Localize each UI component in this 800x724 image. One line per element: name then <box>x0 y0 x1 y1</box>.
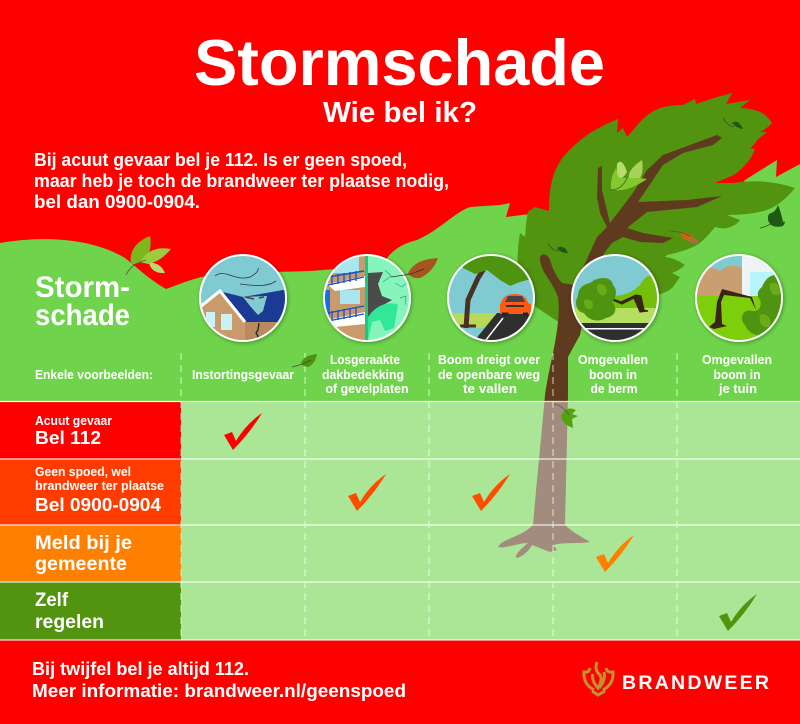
row text: meld bij je gemeente: Meld bij je <box>35 533 132 554</box>
row text: meld bij je gemeente: gemeente <box>35 554 127 575</box>
row text: acuut gevaar: Acuut gevaar <box>35 414 112 428</box>
leaf: dark on canopy left <box>548 243 568 253</box>
heading: Storm-schade: schade <box>35 299 130 332</box>
wordmark: BRANDWEER <box>622 672 771 694</box>
label: omgevallen berm: de berm <box>590 381 638 396</box>
label: boom dreigt: te vallen <box>463 381 517 396</box>
row text: meld bij je gemeente <box>35 533 132 575</box>
icon: fallen tree at verge <box>570 250 660 346</box>
label: losgeraakte dakbedekking: of gevelplaten <box>326 381 409 396</box>
label: boom dreigt: de openbare weg <box>438 367 540 382</box>
title: Stormschade <box>194 26 605 99</box>
green hills <box>0 160 800 640</box>
heading: Storm-schade: Storm- <box>35 271 130 304</box>
tree trunk and branches <box>498 135 722 558</box>
check: omgevallen tuin <box>719 594 757 631</box>
label: instortingsgevaar: Instortingsgevaar <box>192 367 294 382</box>
icon: loose cladding <box>320 250 415 346</box>
row: geen spoed <box>0 459 181 525</box>
icon: fallen tree in garden <box>694 250 786 346</box>
logo: brandweer <box>584 662 771 695</box>
check: omgevallen berm <box>596 535 634 572</box>
intro text: maar heb je toch de brandweer ter plaatse nodig, <box>34 171 449 191</box>
label: omgevallen tuin: boom in <box>714 367 761 382</box>
leaf: dark green at right <box>760 205 785 228</box>
row text: geen spoed: Geen spoed, wel <box>35 465 131 479</box>
icon: flame shield <box>584 662 613 695</box>
tree <box>498 93 795 558</box>
row text: acuut gevaar: Bel 112 <box>35 427 101 448</box>
label: omgevallen berm <box>578 352 648 396</box>
footer band <box>0 641 800 724</box>
row: meld bij gemeente <box>0 525 181 582</box>
row text: zelf regelen: regelen <box>35 612 104 633</box>
label: boom dreigt: Boom dreigt over <box>438 352 540 367</box>
label: boom dreigt <box>438 352 540 396</box>
intro text: Bij acuut gevaar bel je 112. Is er geen spoed, <box>34 150 407 170</box>
heading: Storm-schade <box>35 271 130 332</box>
tree canopy <box>518 93 795 323</box>
subtitle: Wie bel ik? <box>323 97 477 129</box>
check: instortingsgevaar <box>224 413 262 450</box>
intro text: bel dan 0900-0904. <box>34 192 200 212</box>
label: omgevallen tuin: Omgevallen <box>702 352 772 367</box>
footer text <box>32 658 406 701</box>
column labels <box>192 352 772 396</box>
leaf: dark on canopy top right <box>723 118 743 129</box>
label: omgevallen tuin: je tuin <box>718 381 757 396</box>
row text: geen spoed: brandweer ter plaatse <box>35 479 164 493</box>
icon: tree over road <box>445 250 537 346</box>
row text: geen spoed: Bel 0900-0904 <box>35 494 162 515</box>
label: omgevallen tuin <box>702 352 772 396</box>
check: losgeraakte <box>348 474 386 511</box>
row text: geen spoed <box>35 465 164 515</box>
row text: zelf regelen: Zelf <box>35 590 69 611</box>
row text: zelf regelen <box>35 590 104 633</box>
footer text: Meer informatie: brandweer.nl/geenspoed <box>32 680 406 701</box>
icon: house collapse <box>195 250 291 346</box>
label: omgevallen berm: boom in <box>589 367 637 382</box>
footer text: Bij twijfel bel je altijd 112. <box>32 658 249 679</box>
row: acuut gevaar <box>0 402 181 459</box>
leaf: green at hill <box>126 236 171 275</box>
label: losgeraakte dakbedekking <box>322 352 409 396</box>
leaf: brown at cladding icon <box>391 258 438 278</box>
leaf: orange on canopy <box>669 231 700 244</box>
label: losgeraakte dakbedekking: dakbedekking <box>322 367 404 382</box>
label: enkele voorbeelden: Enkele voorbeelden: <box>35 367 153 382</box>
intro text <box>34 150 449 212</box>
row text: acuut gevaar <box>35 414 112 448</box>
row: zelf regelen <box>0 582 181 640</box>
leaf: dark green near labels <box>292 354 317 367</box>
check: boom dreigt <box>472 474 510 511</box>
leaf: green on trunk <box>554 404 578 428</box>
label: omgevallen berm: Omgevallen <box>578 352 648 367</box>
table overlay <box>181 402 800 640</box>
label: losgeraakte dakbedekking: Losgeraakte <box>330 352 400 367</box>
leaf: light green on canopy <box>610 160 647 190</box>
